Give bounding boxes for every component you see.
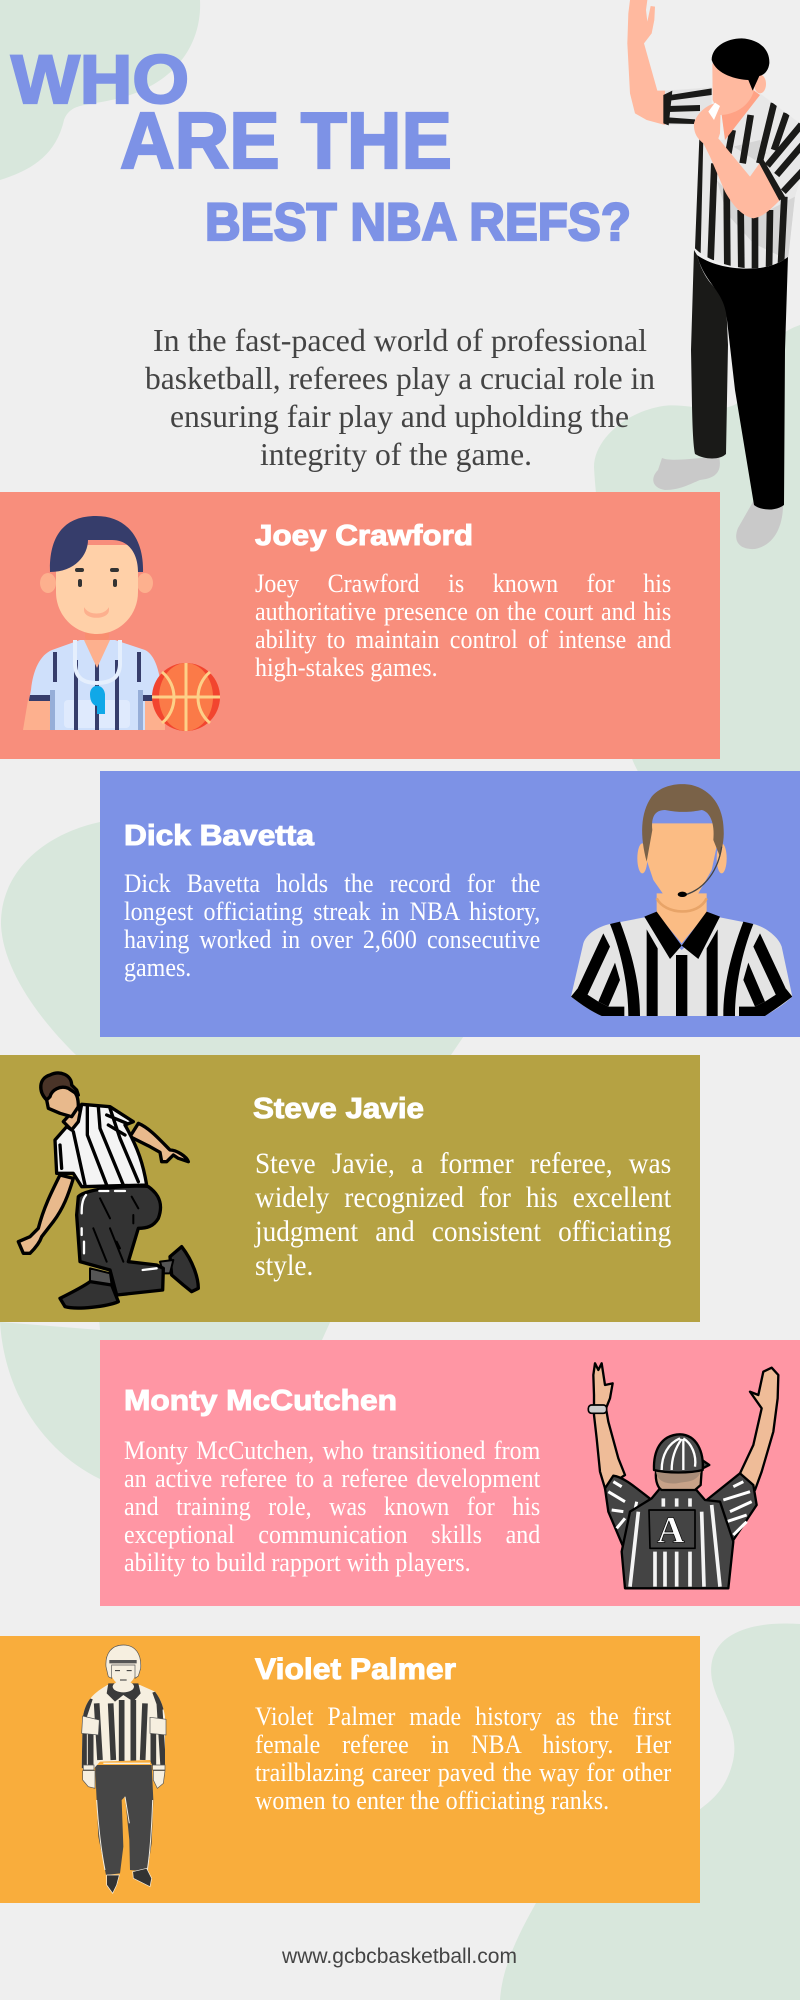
heading: Monty McCutchen (124, 1385, 397, 1417)
panel: Joey Crawford (0, 492, 720, 759)
text block: having worked in over 2,600 consecutive (124, 925, 540, 954)
intro text: ensuring fair play and upholding the (170, 398, 629, 434)
text block (124, 1436, 540, 1577)
text block (254, 1148, 672, 1282)
title: WHO (11, 41, 189, 118)
title: ARE THE (120, 96, 452, 185)
text block: style. (255, 1250, 313, 1282)
text block: Steve Javie, a former referee, was (255, 1148, 671, 1180)
text block: Violet Palmer made history as the first (255, 1702, 671, 1731)
text block: exceptional communication skills and (124, 1520, 540, 1549)
text block: high-stakes games. (255, 653, 438, 682)
text block: games. (124, 953, 191, 982)
intro text: basketball, referees play a crucial role in (145, 360, 655, 396)
heading: Dick Bavetta (124, 820, 315, 852)
panel: Steve Javie (0, 1055, 700, 1322)
text block: trailblazing career paved the way for other (255, 1758, 671, 1787)
text block: Joey Crawford is known for his (255, 569, 671, 598)
text block: and training role, was known for his (124, 1492, 540, 1521)
header: title and hero referee (10, 0, 800, 549)
icon: standing referee with helmet (80, 1645, 167, 1893)
text block: ability to build rapport with players. (124, 1548, 471, 1577)
panel: Violet Palmer (0, 1636, 700, 1903)
text block: female referee in NBA history. Her (255, 1730, 671, 1759)
icon: referee signalling touchdown from behind (588, 1363, 778, 1588)
text block: judgment and consistent officiating (255, 1216, 671, 1248)
heading: Steve Javie (253, 1093, 424, 1125)
text block: an active referee to a referee development (124, 1464, 540, 1493)
heading: Violet Palmer (255, 1653, 456, 1686)
panel: Monty McCutchen (100, 1340, 800, 1606)
icon: hero referee blowing whistle (627, 0, 800, 549)
heading: Joey Crawford (255, 520, 473, 552)
text block: longest officiating streak in NBA history, (124, 897, 540, 926)
text block (255, 569, 671, 682)
title (11, 41, 631, 252)
text block (255, 1702, 672, 1815)
text block: Dick Bavetta holds the record for the (124, 869, 540, 898)
letter A on jersey: A (657, 1509, 685, 1551)
text block: widely recognized for his excellent (255, 1182, 671, 1214)
text block: authoritative presence on the court and his (255, 597, 671, 626)
footer url: www.gcbcbasketball.com (281, 1945, 517, 1968)
intro text: In the fast-paced world of professional (153, 322, 647, 358)
icon: cartoon referee with basketball (20, 516, 220, 732)
text block (124, 869, 540, 982)
intro text (145, 322, 655, 472)
panel: Dick Bavetta (100, 771, 800, 1037)
text block: ability to maintain control of intense and (255, 625, 671, 654)
text block: Monty McCutchen, who transitioned from (124, 1436, 540, 1465)
icon: referee with headset (571, 784, 792, 1016)
title: BEST NBA REFS? (205, 193, 631, 252)
icon: kneeling referee (18, 1073, 198, 1308)
intro text: integrity of the game. (260, 436, 532, 472)
text block: women to enter the officiating ranks. (255, 1786, 609, 1815)
